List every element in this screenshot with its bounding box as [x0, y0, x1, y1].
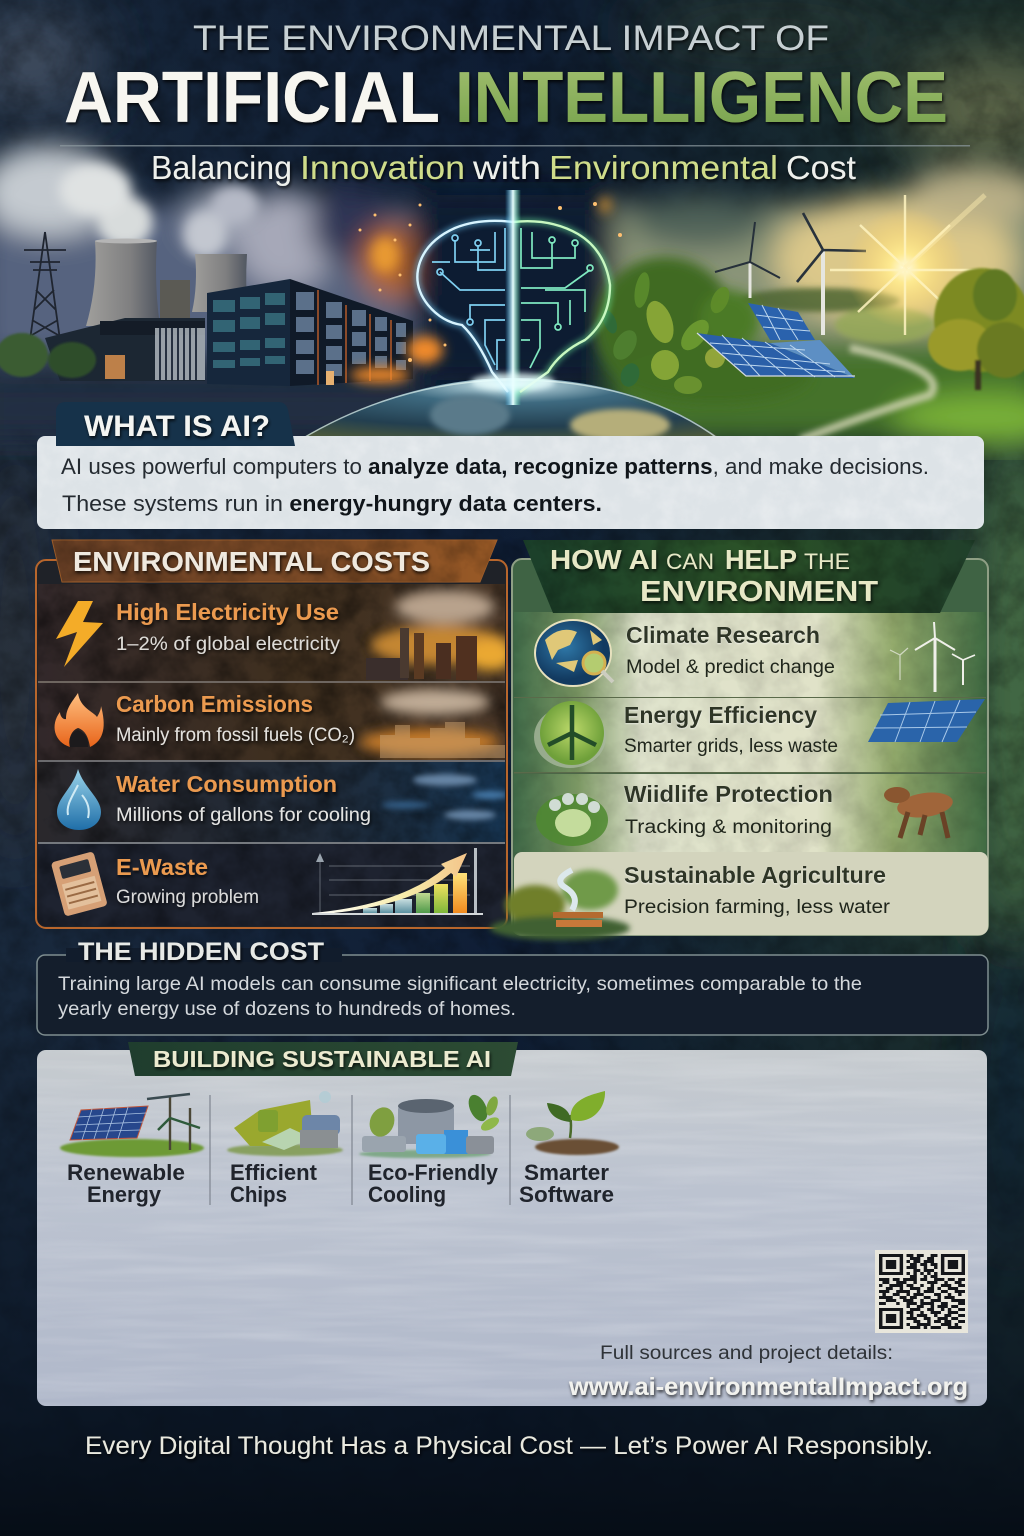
title line: the environmental impact of: THE ENVIRONMENTAL IMPACT OF: [193, 19, 829, 58]
row: water consumption: Water Consumption: [116, 771, 337, 797]
left shrubs: [0, 333, 96, 378]
icon: agricultural robot arm: [553, 870, 603, 927]
row: wildlife protection: Wiidlife Protection: [624, 781, 833, 807]
row: climate research: Model & predict change: [626, 657, 835, 678]
row: wildlife protection: Tracking & monitoring: [625, 817, 832, 838]
foliage behind the panels: [595, 257, 810, 403]
heading tab: how AI can help the environment: HELP: [725, 544, 797, 575]
heading tab: how AI can help the environment: [523, 540, 975, 613]
title: artificial intelligence: ARTIFICIAL: [64, 58, 440, 138]
row: sustainable agriculture: Precision farming, less water: [624, 897, 891, 918]
item: efficient chips: Chips: [230, 1182, 287, 1207]
icon: cooling unit with leaves: [359, 1092, 501, 1158]
panel: environmental costs: [36, 540, 514, 928]
chart: rising e-waste bars with arrow: [312, 848, 483, 915]
heading tab: how AI can help the environment: THE: [804, 549, 850, 574]
icon: solar panel and turbine: [60, 1094, 204, 1157]
icon: AI brain made of circuits: [417, 221, 610, 392]
hidden cost text: yearly energy use of dozens to hundreds of homes.: [58, 998, 516, 1020]
heading tab: what is AI: [56, 402, 295, 446]
panel: what is AI: [37, 402, 984, 529]
subtitle: [151, 149, 856, 186]
item: renewable energy: [60, 1094, 204, 1207]
icon: flame: [55, 693, 104, 747]
hero sky and ground: [0, 145, 1024, 446]
row: wildlife protection: [514, 774, 986, 852]
definition text box: AI uses powerful computers to analyze data, recognize patterns , and make decisions.: [61, 454, 929, 479]
central light beam: [471, 190, 555, 405]
row: high electricity use: High Electricity Use: [116, 599, 339, 625]
icon: stacked green chips: [227, 1091, 343, 1156]
icon: globe with magnifier: [535, 620, 613, 686]
row: energy efficiency: [514, 698, 986, 774]
item: smarter software: Software: [519, 1182, 614, 1207]
greenery mound: [490, 870, 630, 940]
item: efficient chips: Efficient: [230, 1160, 318, 1185]
row: e-waste: E-Waste: [116, 854, 208, 880]
definition text box: These systems run in energy-hungry data centers.: [62, 491, 602, 516]
steam plumes from the cooling towers: [59, 164, 259, 259]
item: efficient chips: [227, 1091, 343, 1207]
heading tab: how AI can help the environment: HOW AI: [550, 544, 658, 575]
item: smarter software: [519, 1091, 619, 1207]
subtitle: Cost: [786, 149, 856, 186]
subtitle: Balancing: [151, 149, 292, 186]
row: climate research: Climate Research: [626, 622, 820, 648]
item: smarter software: Smarter: [524, 1160, 609, 1185]
row: e-waste: Growing problem: [116, 887, 259, 908]
row: carbon emissions: Mainly from fossil fuels (CO₂): [116, 725, 355, 746]
heading tab: how AI can help the environment: ENVIRONMENT: [640, 576, 878, 608]
hidden cost heading: THE HIDDEN COST: [78, 938, 324, 966]
item: eco-friendly cooling: Eco-Friendly: [368, 1160, 499, 1185]
heading tab: building sustainable AI: [128, 1042, 518, 1076]
icon: green wind turbine button: [534, 701, 606, 768]
row: carbon emissions: Carbon Emissions: [116, 691, 313, 717]
row: high electricity use: 1–2% of global electricity: [116, 634, 341, 655]
icon: water drop: [57, 769, 101, 830]
icon: sun: [830, 195, 985, 335]
hidden cost text: [58, 973, 862, 1020]
panel: the hidden cost: [37, 938, 988, 1035]
icon: animal silhouette: [884, 787, 954, 838]
heading tab: environmental costs: [52, 540, 497, 582]
item: renewable energy: Energy: [87, 1182, 162, 1207]
icon: wind turbines: [715, 213, 866, 335]
icon: seedling: [526, 1091, 619, 1155]
panel: how AI can help the environment: [490, 540, 988, 940]
icon: solar panel: [868, 699, 985, 742]
icon: lightning bolt: [56, 601, 103, 667]
sources label: Full sources and project details:: [600, 1343, 893, 1364]
row: high electricity use: [38, 584, 514, 683]
icon: data center buildings: [45, 279, 413, 386]
icon: old electronic device: [51, 851, 108, 917]
row: energy efficiency: Energy Efficiency: [624, 702, 817, 728]
row: climate research: [514, 612, 986, 698]
heading tab: how AI can help the environment: CAN: [666, 549, 714, 574]
icon: paw print in leaves: [536, 793, 608, 846]
icon: transmission pylon: [24, 232, 66, 340]
stream: [800, 348, 933, 440]
icon: solar panels: [697, 303, 855, 378]
title block: [60, 19, 970, 186]
icon: cooling towers: [86, 238, 248, 326]
item: eco-friendly cooling: [359, 1092, 501, 1207]
item: eco-friendly cooling: Cooling: [368, 1182, 446, 1207]
title: artificial intelligence: [64, 58, 948, 138]
row: energy efficiency: Smarter grids, less waste: [624, 736, 838, 757]
earth arc: [306, 378, 717, 436]
row: water consumption: Millions of gallons for cooling: [116, 805, 371, 826]
website link: www.ai-environmentalImpact.org: [568, 1373, 968, 1401]
item: renewable energy: Renewable: [67, 1160, 185, 1185]
hidden cost text: Training large AI models can consume significant electricity, sometimes comparable to the: [58, 973, 862, 995]
row: sustainable agriculture: Sustainable Agriculture: [624, 862, 886, 888]
hero illustration: industry versus nature split by an AI brain: [0, 145, 1024, 446]
subtitle: Environmental: [549, 149, 778, 186]
row: water consumption: [38, 762, 508, 844]
heading tab: building sustainable AI: BUILDING SUSTAINABLE AI: [153, 1046, 491, 1072]
heading tab: what is AI: WHAT IS AI?: [84, 410, 270, 443]
heading tab: environmental costs: ENVIRONMENTAL COSTS: [73, 546, 430, 577]
subtitle: Innovation: [300, 149, 465, 186]
row: e-waste: [38, 844, 505, 926]
right tree: [928, 268, 1024, 390]
definition text box: [37, 436, 984, 529]
row: sustainable agriculture: [490, 852, 988, 940]
sparks and fire glow: [350, 197, 622, 383]
title: artificial intelligence: INTELLIGENCE: [455, 58, 948, 138]
icon: QR code: [875, 1250, 968, 1333]
row: carbon emissions: [38, 683, 505, 762]
subtitle: with: [472, 149, 541, 186]
panel: building sustainable AI: [37, 1042, 987, 1406]
footer tagline: Every Digital Thought Has a Physical Cost — Let’s Power AI Responsibly.: [85, 1432, 933, 1460]
